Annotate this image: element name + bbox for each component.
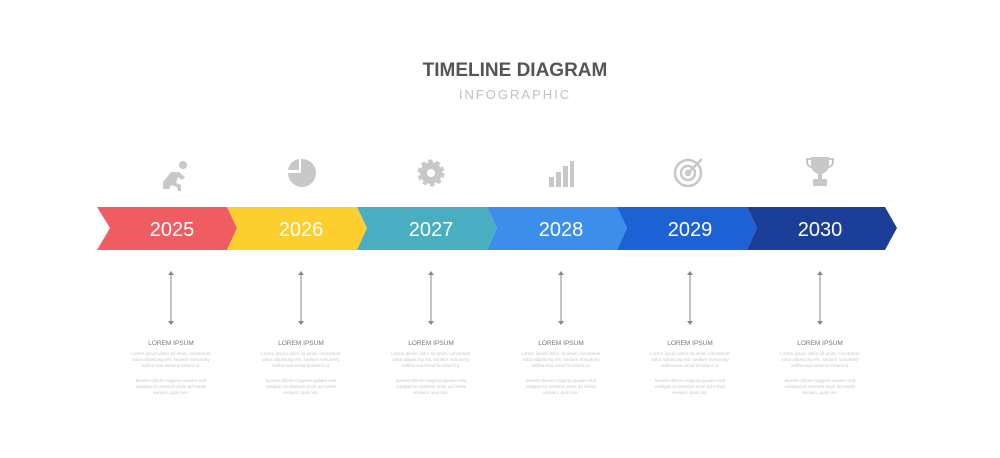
text: laoreet dolore magena quaam erat volutpat Ut wisimes enim ad minim veniam, quis nos. [266, 378, 336, 395]
text columns: Lorem ipsum dolor sit amet, conctetuer volut adipiscing elit, sediam nonummy nafiha eua smod tincidunt ut. [131, 351, 211, 368]
text: laoreet dolore magena quaam erat volutpat Ut wisimes enim ad minim veniam, quis nos. [396, 378, 466, 395]
text: Lorem ipsum dolor sit amet, conctetuer volut adipiscing elit, sediam nonummy nafiha eua smod tincidunt ut. [650, 351, 730, 368]
text columns: laoreet dolore magena quaam erat volutpat Ut wisimes enim ad minim veniam, quis nos. [136, 378, 206, 395]
years: 2025 [150, 219, 194, 241]
double arrows [171, 272, 820, 324]
text: LOREM IPSUM [408, 340, 454, 347]
text: laoreet dolore magena quaam erat volutpat Ut wisimes enim ad minim veniam, quis nos. [785, 378, 855, 395]
years: 2027 [409, 219, 453, 241]
text: LOREM IPSUM [667, 340, 713, 347]
text: Lorem ipsum dolor sit amet, conctetuer volut adipiscing elit, sediam nonummy nafiha eua smod tincidunt ut. [521, 351, 601, 368]
text columns: LOREM IPSUM [148, 340, 194, 347]
icon: gear [420, 162, 442, 184]
icon: bar chart [549, 161, 574, 187]
subtitle: INFOGRAPHIC [459, 87, 571, 102]
text: laoreet dolore magena quaam erat volutpat Ut wisimes enim ad minim veniam, quis nos. [526, 378, 596, 395]
icon: trophy [807, 157, 833, 186]
years: 2030 [798, 219, 842, 241]
years [150, 219, 842, 241]
text: Lorem ipsum dolor sit amet, conctetuer volut adipiscing elit, sediam nonummy nafiha eua smod tincidunt ut. [391, 351, 471, 368]
text: laoreet dolore magena quaam erat volutpat Ut wisimes enim ad minim veniam, quis nos. [655, 378, 725, 395]
segments [97, 207, 897, 250]
years: 2026 [279, 219, 323, 241]
years: 2029 [668, 219, 712, 241]
text: LOREM IPSUM [538, 340, 584, 347]
text: Lorem ipsum dolor sit amet, conctetuer volut adipiscing elit, sediam nonummy nafiha eua smod tincidunt ut. [780, 351, 860, 368]
text: LOREM IPSUM [278, 340, 324, 347]
years: 2028 [539, 219, 583, 241]
title: TIMELINE DIAGRAM [423, 60, 607, 81]
icon: target [675, 159, 702, 186]
icon: pie [288, 159, 316, 187]
text: LOREM IPSUM [797, 340, 843, 347]
text: Lorem ipsum dolor sit amet, conctetuer volut adipiscing elit, sediam nonummy nafiha eua smod tincidunt ut. [261, 351, 341, 368]
icon: runner [163, 161, 187, 191]
text columns [131, 340, 211, 395]
